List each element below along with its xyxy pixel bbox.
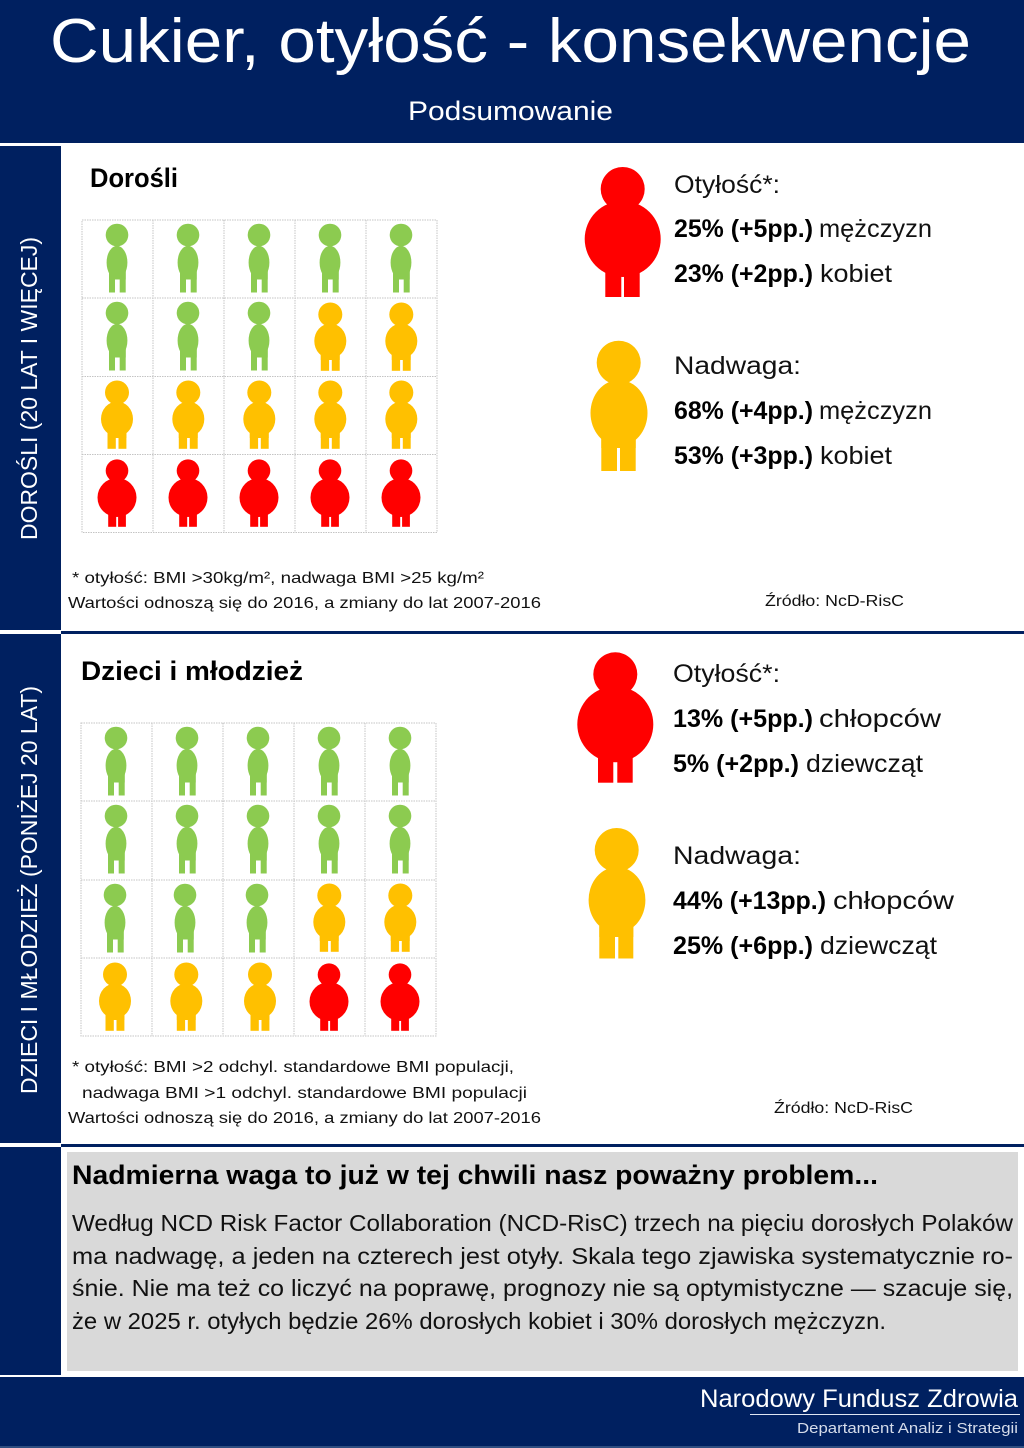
pictogram grid: children xyxy=(81,723,436,1036)
footnote: children: Wartości odnoszą się do 2016, a zmiany do lat 2007-2016 xyxy=(68,1110,541,1127)
stats: overweight (adults): 53% (+3pp.) xyxy=(674,442,813,470)
panel: children and youth xyxy=(68,652,955,1127)
summary heading: Nadmierna waga to już w tej chwili nasz poważny problem... xyxy=(72,1160,878,1190)
summary body: że w 2025 r. otyłych będzie 26% dorosłych kobiet i 30% dorosłych mężczyzn. xyxy=(72,1308,886,1334)
stats: overweight (adults): 68% (+4pp.) xyxy=(674,397,813,425)
summary body: Według NCD Risk Factor Collaboration (NCD-RisC) trzech na pięciu dorosłych Polaków xyxy=(72,1210,1013,1236)
header band xyxy=(0,0,1024,143)
stats: obesity (adults) xyxy=(674,171,932,288)
stats: obesity (children): dziewcząt xyxy=(806,750,923,778)
heading: adults: Dorośli xyxy=(90,163,178,193)
summary body: ma nadwagę, a jeden na czterech jest otyły. Skala tego zjawiska systematycznie ro- xyxy=(72,1243,1013,1269)
icon: large obese figure (adults) xyxy=(585,167,661,297)
stats: overweight (children): chłopców xyxy=(833,887,955,915)
sidebar: children: DZIECI I MŁODZIEŻ (PONIŻEJ 20 LAT) xyxy=(16,686,42,1094)
stats: obesity (adults): mężczyzn xyxy=(819,215,932,243)
sidebar: summary block xyxy=(0,1147,61,1375)
source: adults: Źródło: NcD-RisC xyxy=(765,591,904,610)
panel: adults xyxy=(68,163,932,612)
stats: obesity (adults): Otyłość*: xyxy=(674,171,780,199)
footnote: adults xyxy=(68,570,541,612)
footnote: adults: Wartości odnoszą się do 2016, a zmiany do lat 2007-2016 xyxy=(68,595,541,612)
stats: overweight (children): 25% (+6pp.) xyxy=(673,932,813,960)
icon: large obese figure (children) xyxy=(577,652,653,783)
summary body: śnie. Nie ma też co liczyć na poprawę, prognozy nie są optymistyczne — szacuje się, xyxy=(72,1275,1013,1301)
stats: obesity (children): 5% (+2pp.) xyxy=(673,750,799,778)
panel: summary text xyxy=(67,1152,1018,1371)
source: children: Źródło: NcD-RisC xyxy=(774,1098,913,1117)
icon: large overweight figure (adults) xyxy=(590,341,648,471)
stats: overweight (adults): Nadwaga: xyxy=(674,352,801,380)
stats: obesity (children): Otyłość*: xyxy=(673,660,780,688)
stats: overweight (adults) xyxy=(674,352,932,470)
stats: overweight (children): dziewcząt xyxy=(820,932,937,960)
subtitle: Podsumowanie xyxy=(408,96,613,126)
footer band xyxy=(0,1377,1024,1448)
stats: obesity (adults): 23% (+2pp.) xyxy=(674,260,813,288)
footer department: Departament Analiz i Strategii xyxy=(797,1420,1018,1437)
stats: obesity (children): chłopców xyxy=(819,705,942,733)
stats: overweight (children): Nadwaga: xyxy=(673,842,801,870)
icon: large overweight figure (children) xyxy=(589,828,645,958)
footnote: children xyxy=(68,1059,541,1127)
footer organisation name: Narodowy Fundusz Zdrowia xyxy=(700,1385,1018,1413)
stats: obesity (adults): kobiet xyxy=(820,260,892,288)
stats: overweight (adults): kobiet xyxy=(820,442,892,470)
stats: overweight (adults): mężczyzn xyxy=(819,397,932,425)
stats: obesity (children) xyxy=(673,660,942,778)
stats: overweight (children): 44% (+13pp.) xyxy=(673,887,826,915)
footnote: adults: * otyłość: BMI >30kg/m², nadwaga BMI >25 kg/m² xyxy=(72,570,485,587)
sidebar: adults xyxy=(0,146,61,630)
footnote: children: * otyłość: BMI >2 odchyl. standardowe BMI populacji, xyxy=(72,1059,514,1076)
stats: obesity (children): 13% (+5pp.) xyxy=(673,705,813,733)
heading: children: Dzieci i młodzież xyxy=(81,656,303,686)
stats: obesity (adults): 25% (+5pp.) xyxy=(674,215,813,243)
sidebar: adults: DOROŚLI (20 LAT I WIĘCEJ) xyxy=(15,237,42,540)
pictogram grid: adults xyxy=(82,220,437,532)
stats: overweight (children) xyxy=(673,842,955,960)
title: Cukier, otyłość - konsekwencje xyxy=(50,7,971,76)
footnote: children: nadwaga BMI >1 odchyl. standardowe BMI populacji xyxy=(82,1085,527,1102)
summary body xyxy=(72,1210,1013,1334)
sidebar: children xyxy=(0,634,61,1143)
